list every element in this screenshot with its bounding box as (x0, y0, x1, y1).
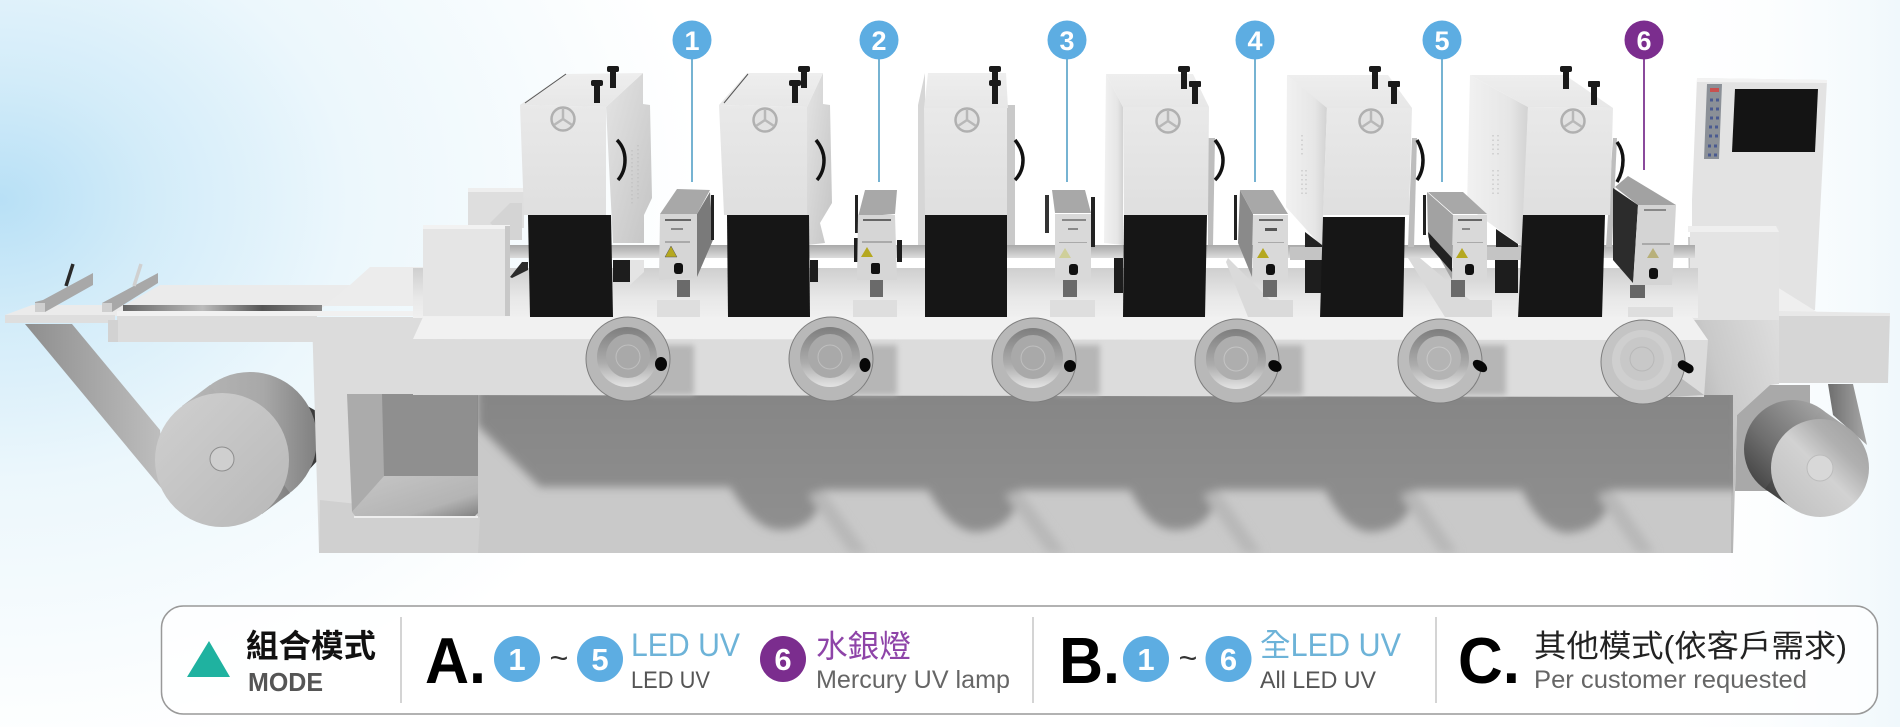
handwheel (1156, 110, 1180, 132)
bolts (591, 66, 619, 103)
LED UV head 2 (853, 190, 902, 317)
callout 3: 3 (1059, 26, 1075, 56)
left feed belt and roller (25, 324, 318, 527)
option C: 其他模式(依客戶需求) (1534, 629, 1847, 664)
touch screen (1732, 89, 1818, 152)
option A: ~ (550, 640, 568, 676)
mode heading: 組合模式 (246, 628, 376, 664)
handwheel (1562, 110, 1584, 132)
printing unit 2 (719, 66, 832, 317)
LED UV head 1 (657, 189, 714, 317)
callout 3 (1048, 20, 1086, 182)
callout 4: 4 (1247, 26, 1263, 56)
right roller (1735, 385, 1869, 517)
roller 5 (1398, 319, 1489, 403)
icon: teal triangle (187, 641, 230, 677)
printing unit 4 (1104, 66, 1223, 317)
option A: LED UV (631, 627, 741, 663)
callout 2 (860, 20, 898, 182)
callout 1: 1 (684, 26, 700, 56)
option B: 1 (1137, 642, 1155, 677)
callout 6 (1624, 20, 1664, 170)
option B: 全LED UV (1260, 627, 1402, 663)
option B (1059, 624, 1402, 697)
control buttons strip (1704, 84, 1722, 159)
option A: 6 (774, 642, 792, 677)
printing unit 1 (520, 66, 652, 317)
option B: ~ (1179, 640, 1197, 676)
option B: All LED UV (1260, 667, 1376, 694)
printing unit 3 (918, 66, 1023, 317)
LED UV head 4 (1226, 190, 1293, 317)
mercury lamp head 6 (1613, 176, 1676, 318)
option A: Mercury UV lamp (816, 666, 1010, 694)
roller 2 (789, 317, 873, 401)
option B: B. (1059, 624, 1120, 697)
option A (425, 624, 1010, 697)
left feed table (5, 264, 425, 342)
machine illustration (5, 66, 1890, 553)
option A: 5 (591, 642, 609, 677)
LED UV head 5 (1408, 192, 1492, 317)
console and right column (1688, 78, 1890, 553)
sheet guide 2 (102, 264, 158, 312)
option A: LED UV (631, 667, 710, 694)
option B: 6 (1220, 642, 1237, 677)
legend panel (162, 606, 1878, 714)
callout 5 (1422, 20, 1462, 182)
handwheel (956, 108, 978, 132)
handwheel (1360, 110, 1382, 132)
option A: 1 (508, 642, 526, 677)
rear base plate and bar (413, 188, 1698, 318)
frame window (347, 394, 478, 518)
roller 3 (992, 318, 1076, 402)
bolts (1369, 66, 1400, 104)
rollers (586, 317, 1695, 404)
handwheel (552, 108, 574, 130)
callout 1 (672, 20, 712, 182)
printing unit 6 (1467, 66, 1623, 318)
infeed block (423, 225, 510, 316)
lower frame body (312, 317, 1740, 553)
bolts (989, 66, 1001, 104)
bolts (789, 66, 810, 103)
sheet guide 1 (35, 264, 93, 312)
mode heading (246, 628, 376, 697)
callout 2: 2 (871, 26, 887, 56)
roller 4 (1195, 319, 1284, 403)
mode heading: MODE (248, 667, 323, 697)
roller 1 (586, 317, 670, 401)
callout 4 (1236, 20, 1274, 182)
back box and infeed roller (468, 188, 528, 278)
callout 6: 6 (1636, 26, 1652, 56)
roller 6 (1601, 320, 1695, 404)
bolts (1560, 66, 1600, 105)
option C: C. (1458, 624, 1520, 697)
bolts (1178, 66, 1201, 104)
callout 5: 5 (1434, 26, 1450, 56)
option C (1458, 624, 1847, 697)
option A: 水銀燈 (816, 628, 911, 664)
LED UV head 3 (1045, 190, 1095, 317)
cast shadows on frame (477, 385, 1740, 553)
option C: Per customer requested (1534, 666, 1807, 694)
option A: A. (425, 624, 486, 697)
printing unit 5 (1286, 66, 1423, 318)
front plate (413, 317, 1708, 397)
handwheel (754, 108, 776, 132)
